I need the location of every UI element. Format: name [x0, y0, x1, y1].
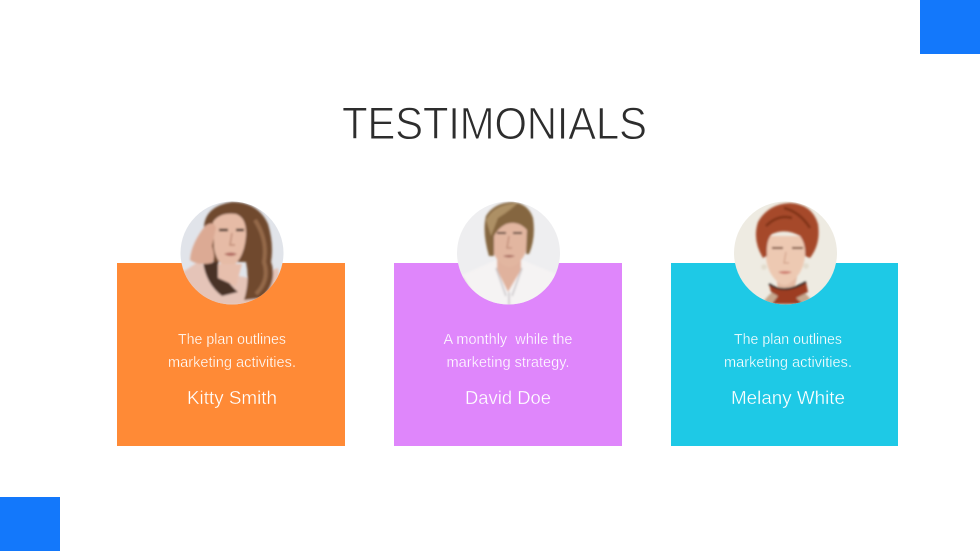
testimonial text [168, 332, 296, 371]
corner block: bottom left [0, 497, 60, 551]
portrait: Kitty Smith [180, 201, 284, 305]
testimonial text: marketing strategy. [446, 355, 570, 371]
name: Melany White [731, 387, 845, 408]
corner block: top right [920, 0, 980, 54]
panel: Melany White [671, 201, 898, 446]
testimonial text [724, 332, 852, 371]
panel: David Doe [394, 201, 622, 446]
card background: cyan [671, 263, 898, 446]
card background: orange [117, 263, 345, 446]
title: TESTIMONIALS [342, 99, 647, 149]
testimonial text: The plan outlines [734, 332, 842, 348]
testimonial text: A monthly while the [444, 332, 572, 348]
card background: violet [394, 263, 622, 446]
name: Kitty Smith [187, 387, 277, 408]
testimonial text: The plan outlines [178, 332, 286, 348]
testimonial text: marketing activities. [168, 355, 296, 371]
portrait: David Doe [456, 201, 560, 305]
testimonial text [444, 332, 572, 371]
name: David Doe [465, 387, 551, 408]
testimonial text: marketing activities. [724, 355, 852, 371]
portrait: Melany White [734, 201, 838, 305]
panel: Kitty Smith [117, 201, 345, 446]
